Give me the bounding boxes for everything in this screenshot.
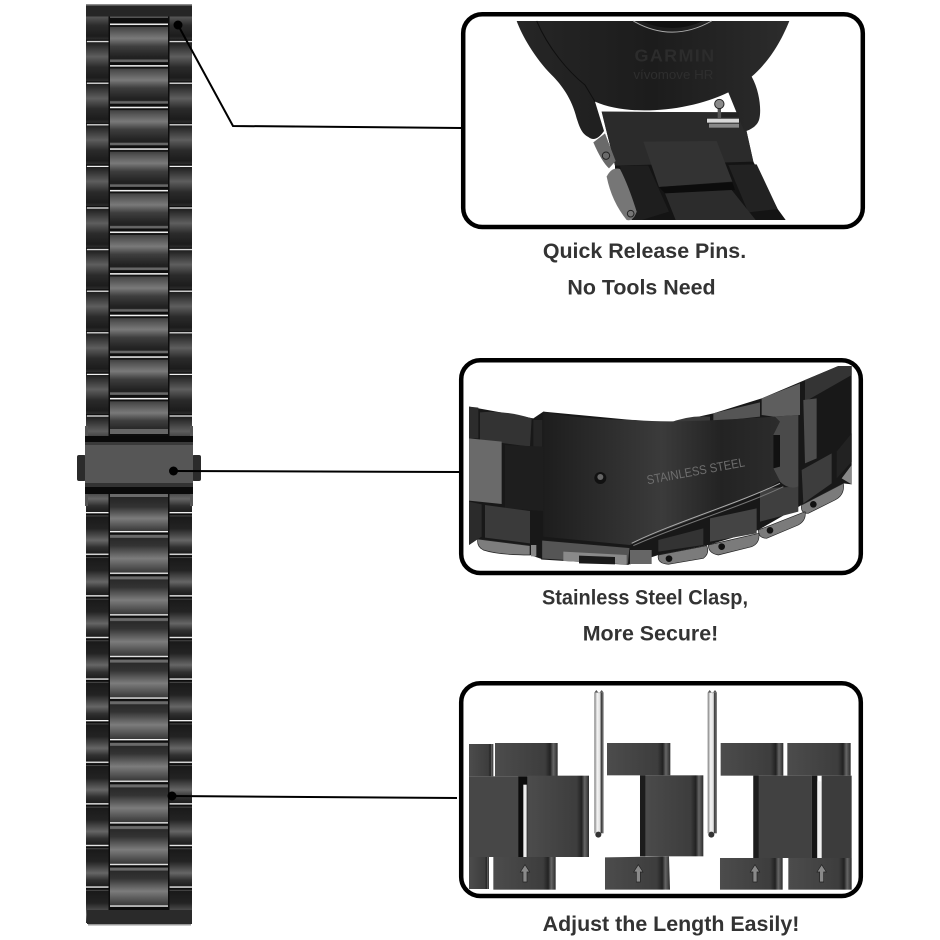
engraved label: STAINLESS STEEL <box>646 455 746 487</box>
panel frame <box>461 360 861 573</box>
pin two <box>708 690 717 838</box>
panel frame <box>461 683 861 896</box>
left link group <box>469 743 589 890</box>
watch and strap close-up: vívomove HR <box>633 67 713 82</box>
caption: adjust: Adjust the Length Easily! <box>543 912 799 936</box>
clasp close-up <box>469 366 852 564</box>
pin one <box>594 690 604 838</box>
left links <box>469 407 478 438</box>
caption: clasp: More Secure! <box>583 622 718 646</box>
disassembled links <box>469 690 852 890</box>
quick release pin <box>707 99 739 128</box>
link backing <box>469 366 852 564</box>
connector: link to adjustment panel <box>168 792 457 800</box>
panel: quick release pins <box>463 14 863 227</box>
right chain links <box>668 416 710 423</box>
caption: quick release: Quick Release Pins. <box>543 239 746 263</box>
panel: adjust the length <box>461 683 861 896</box>
panel: stainless steel clasp <box>461 360 861 573</box>
caption: quick release <box>543 239 746 299</box>
panel frame <box>463 14 863 227</box>
hinge <box>773 415 798 488</box>
caption: clasp: Stainless Steel Clasp, <box>542 586 748 610</box>
watch and strap close-up: GARMIN <box>635 46 715 66</box>
upper band links <box>86 4 192 437</box>
connector: top link to quick release panel <box>174 20 461 128</box>
fold-over clasp <box>77 426 201 506</box>
watch band <box>77 4 201 926</box>
clasp release button <box>531 540 652 564</box>
watch and strap close-up <box>517 21 789 220</box>
caption: clasp <box>542 586 748 646</box>
rivet <box>594 472 606 484</box>
clasp plate <box>543 412 780 545</box>
center link group <box>605 743 703 890</box>
caption: quick release: No Tools Need <box>567 275 716 299</box>
right link group <box>720 743 852 890</box>
connector: clasp to clasp panel <box>169 466 459 476</box>
lower band links <box>86 490 192 926</box>
